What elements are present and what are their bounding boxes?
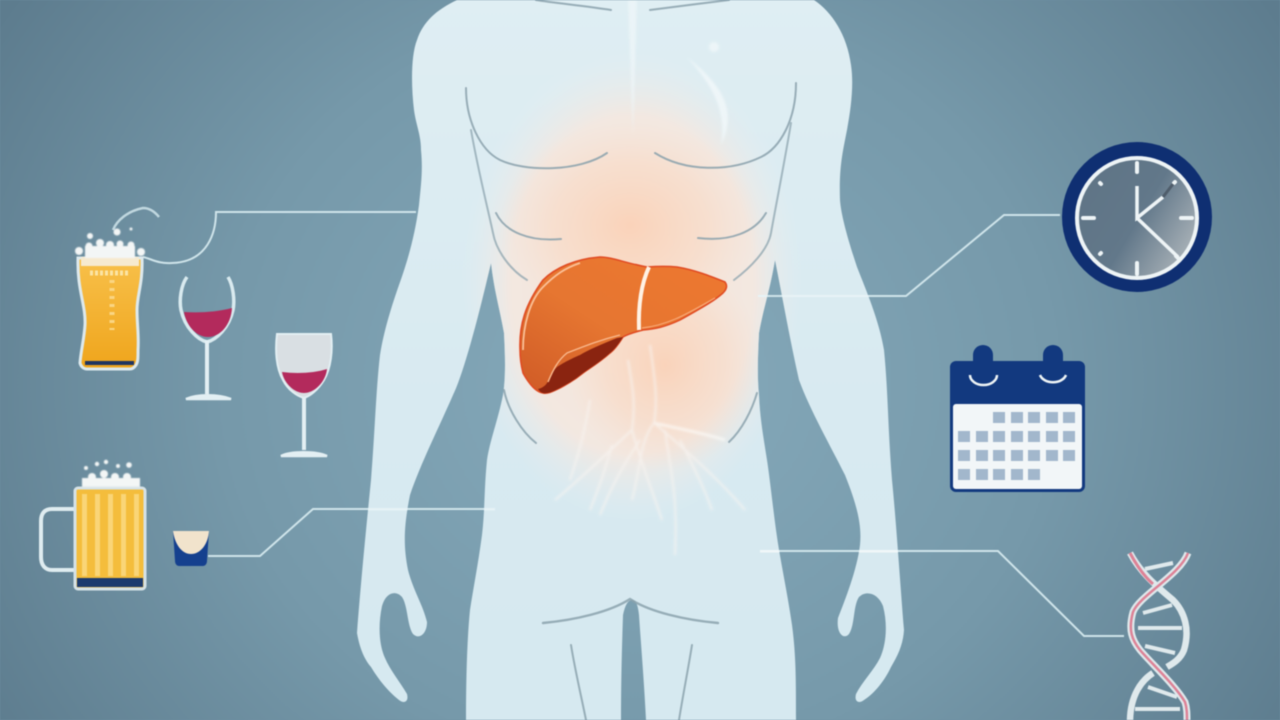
icon: beer glass with foam [75,208,159,369]
DNA rungs [1135,563,1182,709]
icon: wine glass two [276,334,332,456]
liver highlights [639,267,649,330]
foam splash [113,208,159,230]
icon: shot glass [173,531,209,566]
connector lines [143,212,1124,636]
calendar day cells [958,412,1075,480]
DNA pink strand [1131,553,1188,720]
icon: liver [520,257,726,393]
beer glass body [78,258,142,369]
muscle and contour lines [466,0,796,720]
connector: body to DNA [757,551,1124,636]
mug foam [82,460,140,487]
icon: clock [1062,142,1212,292]
clock ticks [1083,163,1192,274]
icon: calendar [950,345,1085,492]
calendar rings [970,345,1066,385]
clock hands [1137,186,1178,257]
connector: beer to body [143,212,416,263]
body silhouette [357,0,904,720]
abdomen glow [360,0,900,552]
human body figure [357,0,904,720]
intestinal vessels [555,345,745,555]
connector: shot glass to body [208,509,503,556]
icon: DNA helix [1130,553,1188,720]
icon: wine glass one [180,277,234,399]
DNA white strand [1130,553,1187,667]
liver shadow underside [538,337,623,393]
icon: beer mug [41,460,145,589]
connector: liver to clock [760,215,1060,296]
